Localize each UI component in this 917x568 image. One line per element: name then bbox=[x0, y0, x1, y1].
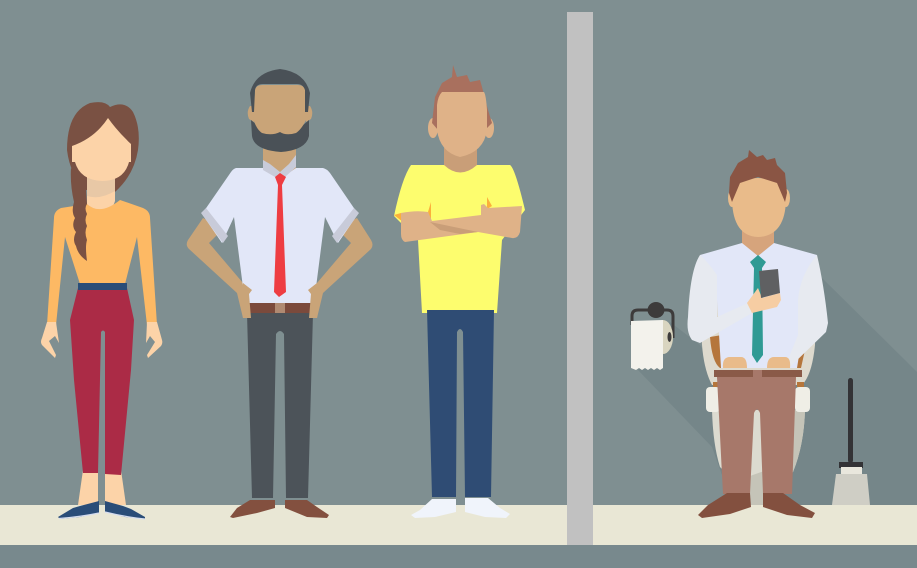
roll core bbox=[668, 332, 672, 342]
left sleeve bbox=[688, 255, 752, 343]
neck bbox=[263, 148, 296, 180]
bristle ring bbox=[841, 467, 862, 474]
paper sheet bbox=[631, 320, 663, 370]
roll side bbox=[653, 320, 673, 354]
brush collar bbox=[839, 462, 863, 468]
holder bracket bbox=[632, 310, 673, 338]
collar and cuffs bbox=[201, 155, 359, 243]
belt bbox=[714, 370, 802, 377]
phone bbox=[759, 269, 780, 298]
left shoe bbox=[698, 493, 751, 518]
hair bbox=[729, 150, 787, 202]
right seat rim bbox=[795, 387, 810, 412]
handle bbox=[848, 378, 853, 463]
right ear bbox=[782, 189, 790, 207]
face bbox=[437, 92, 487, 157]
arm shadow bbox=[430, 222, 478, 234]
long shadows bbox=[638, 278, 917, 505]
trousers bbox=[717, 377, 796, 494]
left shoe bbox=[230, 500, 275, 518]
left forearm over belt bbox=[240, 283, 252, 318]
neck bbox=[87, 175, 115, 213]
bowl column shade bbox=[750, 471, 764, 505]
holder knob bbox=[648, 302, 664, 318]
toilet brush bbox=[832, 378, 870, 505]
bowl right shade bbox=[790, 410, 805, 474]
left shoe bbox=[58, 501, 99, 519]
yellow shirt bbox=[394, 165, 525, 313]
left hand bbox=[41, 322, 59, 358]
shoe soles bbox=[59, 512, 145, 519]
right shoe bbox=[763, 493, 815, 518]
braid bbox=[71, 168, 87, 261]
hair bbox=[67, 102, 139, 192]
brown seat lid pieces bbox=[710, 305, 806, 387]
right shoe bbox=[465, 498, 510, 518]
bowl front column bbox=[750, 410, 764, 505]
ears bbox=[428, 118, 438, 138]
beard bbox=[251, 120, 309, 152]
belt buckle bbox=[753, 370, 762, 377]
neck bbox=[444, 148, 477, 177]
right shoe bbox=[285, 500, 329, 518]
jeans bbox=[427, 310, 494, 497]
tie bbox=[274, 173, 286, 297]
crossed arms bbox=[401, 204, 522, 242]
right hand bbox=[146, 322, 162, 358]
right ear bbox=[484, 118, 494, 138]
face bbox=[732, 178, 786, 237]
toilet paper holder bbox=[631, 302, 673, 370]
neck bbox=[742, 228, 774, 256]
lower skirting bbox=[0, 545, 917, 568]
left knee bbox=[723, 357, 747, 368]
right forearm over belt bbox=[308, 283, 320, 318]
toilet tank back bbox=[702, 300, 815, 385]
belt buckle bbox=[275, 303, 285, 313]
figure: seated man with phone bbox=[688, 150, 828, 518]
shirt bbox=[202, 168, 358, 303]
belt bbox=[246, 303, 314, 313]
figure: bearded man bbox=[187, 69, 372, 518]
figure: woman with braid bbox=[41, 102, 162, 519]
face bbox=[253, 85, 307, 134]
right shoe bbox=[105, 501, 145, 519]
right knee bbox=[767, 357, 790, 368]
ears bbox=[728, 189, 736, 207]
shirt folds bbox=[394, 197, 492, 222]
toilet bbox=[702, 300, 815, 505]
orange top bbox=[47, 200, 157, 325]
neck shadow bbox=[87, 178, 115, 197]
grey trousers bbox=[247, 313, 313, 498]
ears bbox=[248, 106, 312, 122]
left arm bbox=[187, 218, 252, 318]
face bbox=[72, 118, 131, 181]
hair bbox=[250, 69, 310, 112]
bowl bbox=[712, 410, 805, 482]
right sleeve bbox=[785, 255, 828, 367]
ankles bbox=[78, 470, 126, 505]
hand bbox=[747, 288, 781, 313]
brush holder bbox=[832, 474, 870, 505]
left seat rim bbox=[706, 387, 720, 412]
left shoe bbox=[411, 499, 456, 518]
figure: man in yellow t-shirt bbox=[394, 65, 525, 518]
dividing wall bbox=[567, 12, 593, 545]
floor bbox=[0, 505, 917, 545]
tie bbox=[750, 255, 766, 363]
red trousers bbox=[70, 288, 134, 475]
belt bbox=[78, 283, 127, 290]
hair bbox=[432, 65, 492, 130]
shirt body bbox=[700, 243, 817, 368]
right arm bbox=[308, 218, 372, 318]
